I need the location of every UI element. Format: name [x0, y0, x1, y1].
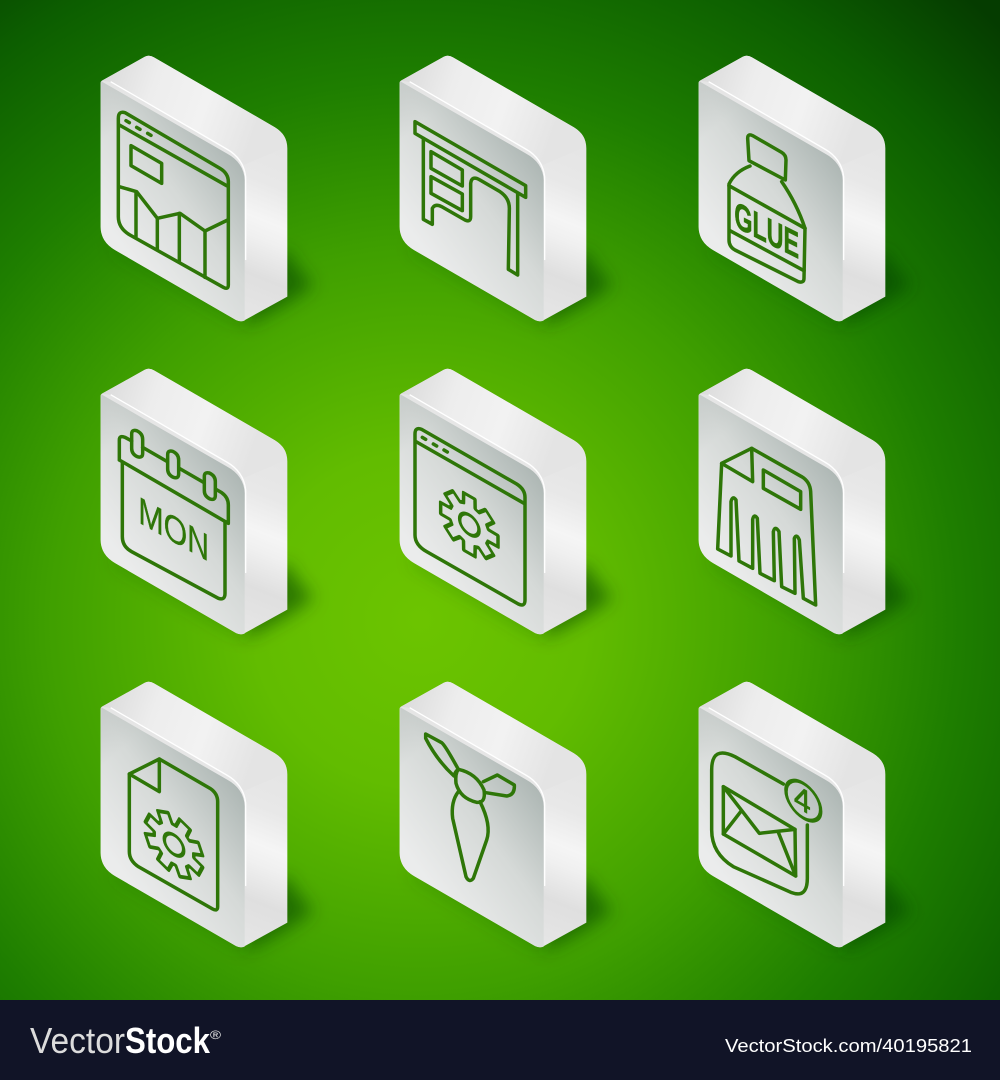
panel: desk tile	[400, 56, 612, 325]
footer logo: VectorStock: Stock	[125, 1020, 211, 1061]
icon: calendar Monday	[119, 430, 228, 599]
panel: browser chart tile	[101, 56, 313, 325]
panel: necktie tile	[400, 682, 612, 951]
footer logo: VectorStock: Vector	[30, 1020, 125, 1061]
footer bar	[0, 1000, 1000, 1080]
panel: paper shredder tile	[699, 369, 911, 638]
footer logo: VectorStock: ®	[210, 1028, 221, 1042]
panel: calendar tile	[101, 369, 313, 638]
icon: glue bottle	[729, 135, 805, 282]
label text: GLUE: GLUE	[734, 194, 799, 267]
badge number: 4	[794, 777, 811, 823]
icon: tied neckerchief	[426, 734, 514, 880]
footer logo: VectorStock	[30, 1020, 221, 1061]
icon: desk with drawers	[415, 122, 526, 275]
icon: browser window with gear	[415, 429, 525, 605]
icon: browser window with area chart	[118, 112, 228, 288]
panel: browser settings tile	[400, 369, 612, 638]
label text: MON: MON	[138, 488, 209, 570]
panel: glue bottle tile	[699, 56, 911, 325]
panel: file settings tile	[101, 682, 313, 951]
footer image reference: VectorStock.com/40195821	[725, 1036, 972, 1056]
icon: envelope with badge	[712, 753, 821, 894]
icon: document with gear	[129, 759, 218, 910]
panel: mail notification tile	[699, 682, 911, 951]
icon: shredded document	[718, 448, 816, 605]
